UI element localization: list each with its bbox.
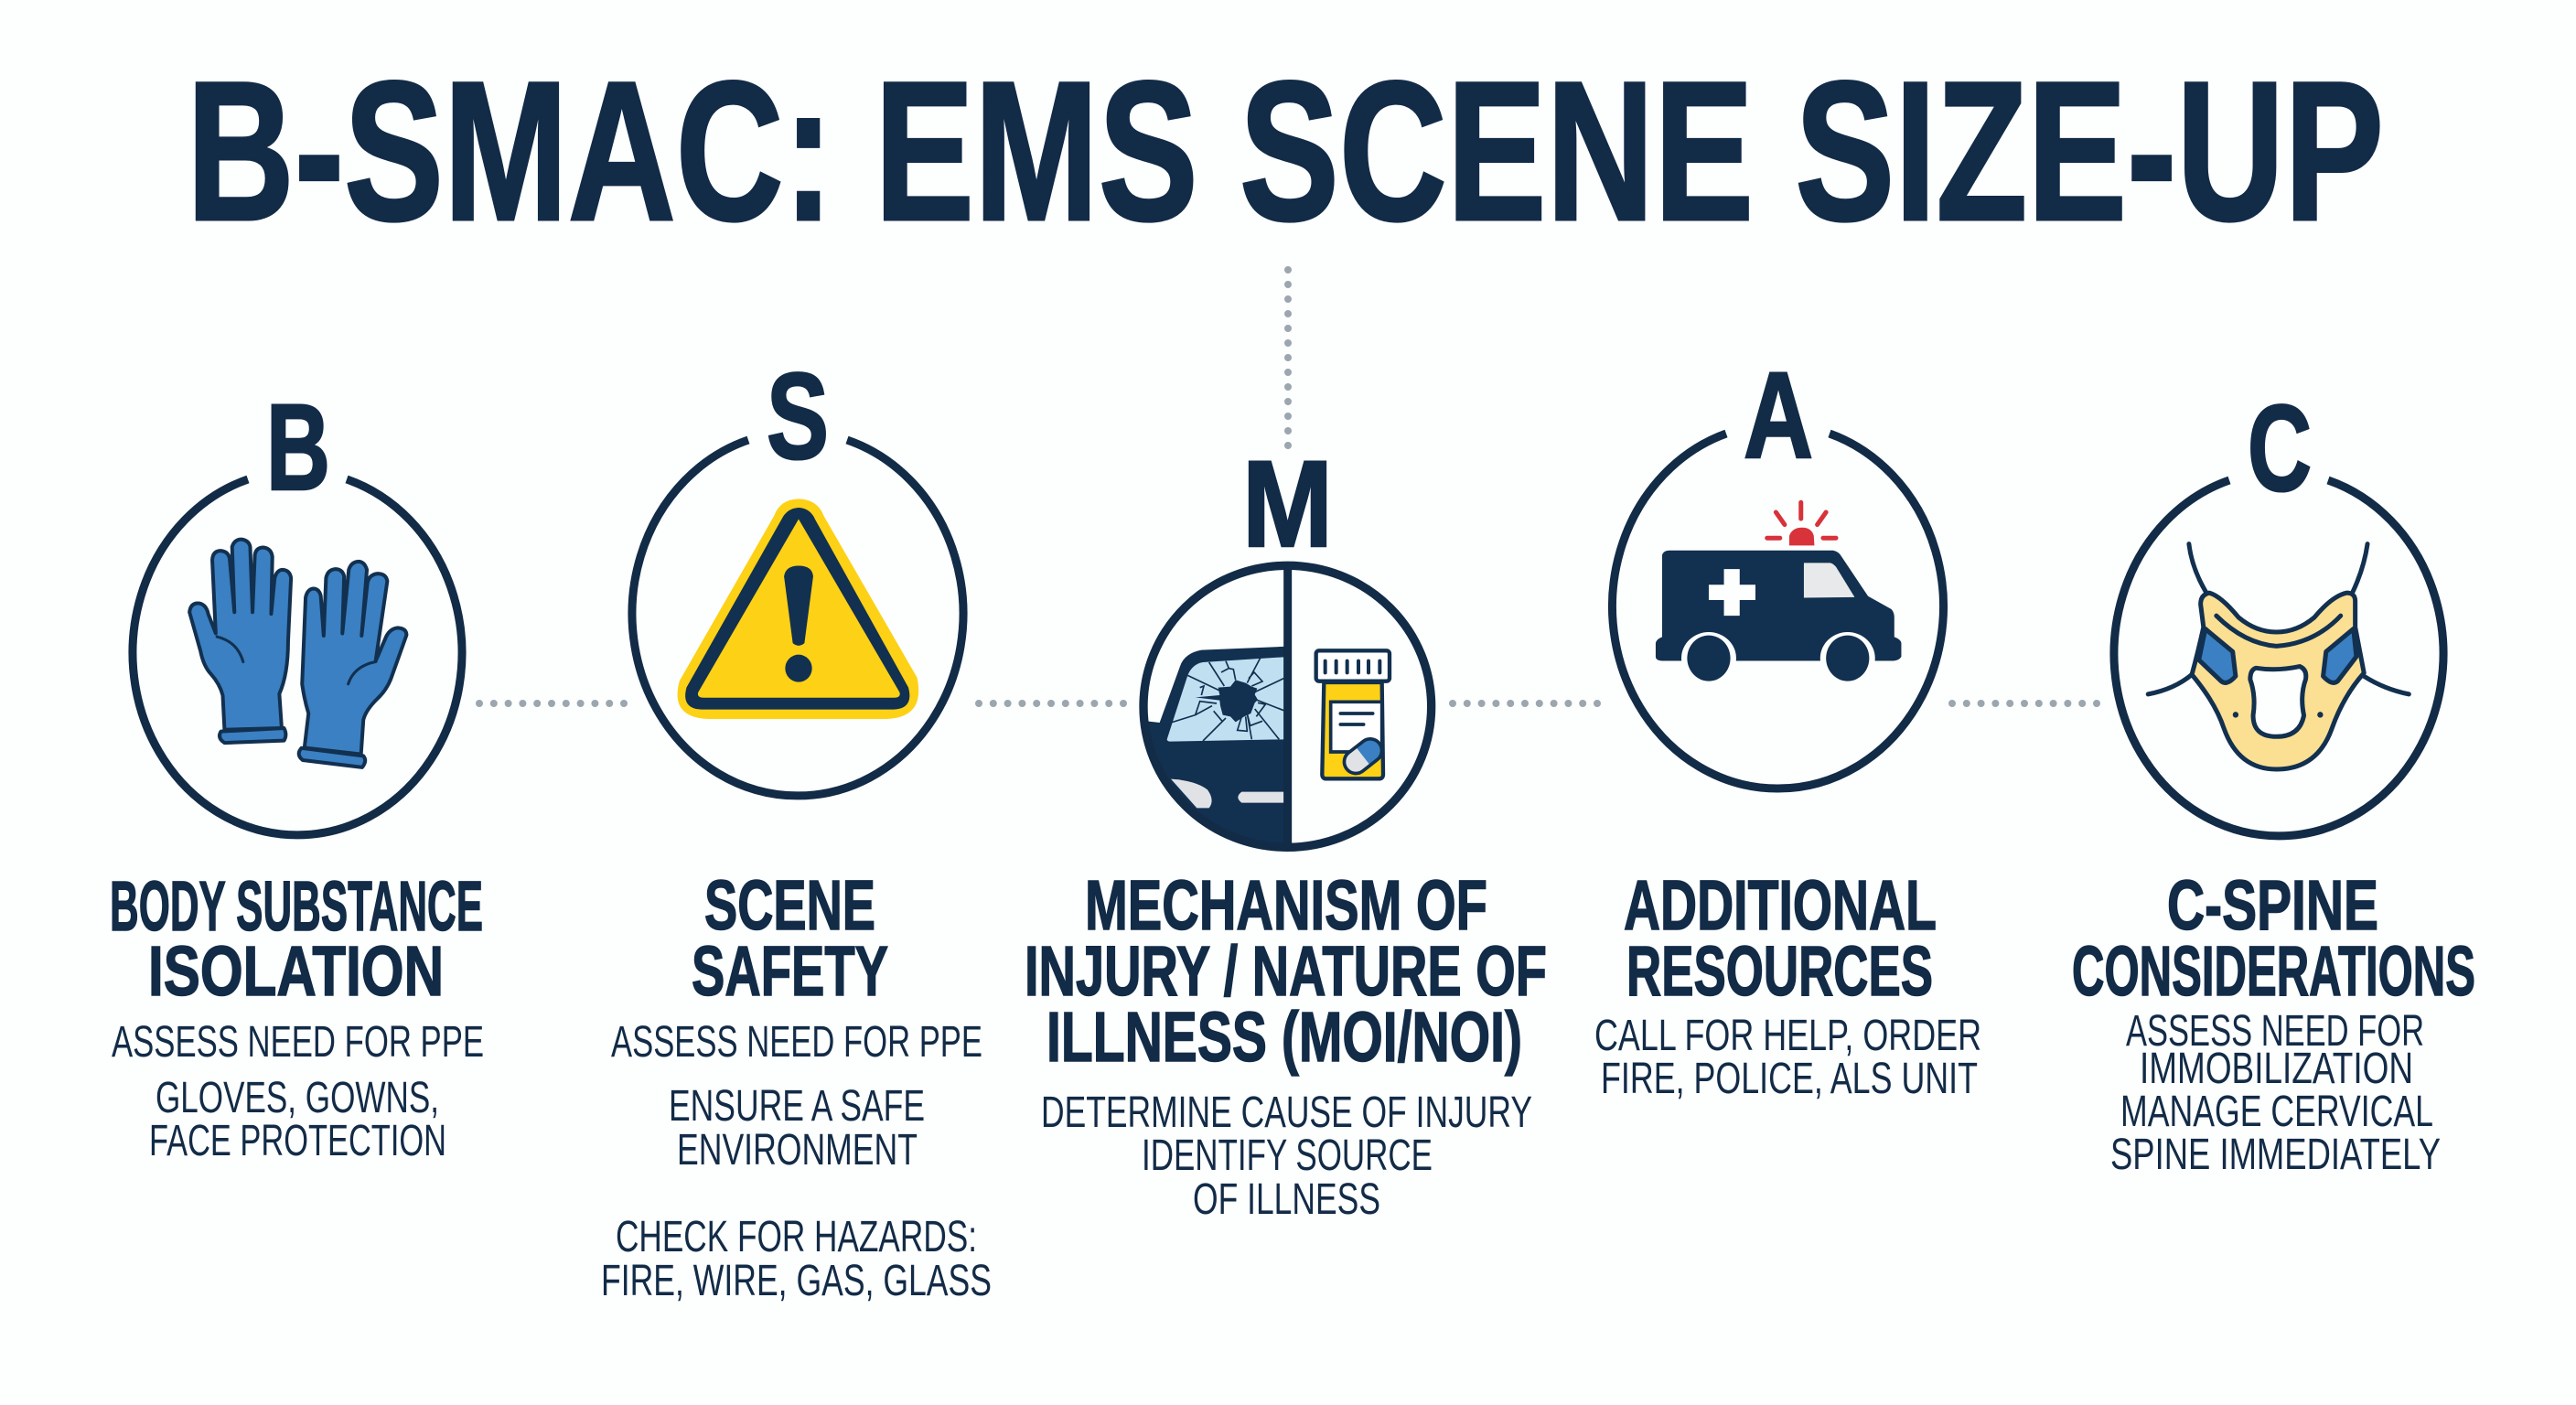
heading S — [692, 866, 888, 1011]
description C: SPINE IMMEDIATELY — [2110, 1131, 2441, 1179]
connector: B to S — [479, 700, 625, 707]
letter C: C — [2248, 381, 2312, 517]
description M: IDENTIFY SOURCE — [1142, 1132, 1433, 1180]
letter B: B — [266, 380, 330, 516]
description B: GLOVES, GOWNS, — [156, 1074, 439, 1122]
connector: title to M — [1284, 270, 1292, 446]
description S: ENSURE A SAFE — [669, 1082, 925, 1131]
circle S — [632, 440, 963, 796]
letter M: M — [1242, 436, 1333, 573]
description M: DETERMINE CAUSE OF INJURY — [1041, 1089, 1532, 1137]
icon: ambulance — [1649, 502, 1906, 687]
heading S: SAFETY — [692, 932, 888, 1011]
description A: FIRE, POLICE, ALS UNIT — [1601, 1055, 1978, 1103]
heading C — [2072, 866, 2475, 1011]
connector: M to A — [1453, 700, 1598, 707]
description S: ASSESS NEED FOR PPE — [611, 1018, 982, 1067]
description C — [2110, 1007, 2441, 1179]
description A: CALL FOR HELP, ORDER — [1594, 1012, 1981, 1060]
heading A: RESOURCES — [1626, 932, 1933, 1011]
connector: A to C — [1952, 700, 2098, 707]
panel: C c-spine considerations — [2072, 381, 2475, 1179]
heading M — [1025, 866, 1547, 1077]
letter S: S — [767, 349, 829, 485]
heading B: ISOLATION — [148, 932, 444, 1011]
heading A: ADDITIONAL — [1624, 866, 1937, 945]
letter A: A — [1744, 348, 1813, 484]
heading B — [110, 867, 483, 1011]
heading M: MECHANISM OF — [1085, 866, 1487, 945]
icon: warning triangle — [678, 499, 918, 719]
description M — [1041, 1089, 1532, 1224]
description C: MANAGE CERVICAL — [2120, 1088, 2433, 1136]
icon: gloves — [189, 540, 406, 767]
circle B — [133, 479, 462, 835]
car — [1149, 646, 1284, 843]
panel: A additional resources — [1594, 348, 1981, 1103]
description A — [1594, 1012, 1981, 1103]
icon: cervical collar — [2148, 544, 2409, 769]
description S — [601, 1018, 992, 1305]
description B — [112, 1018, 484, 1165]
description S: CHECK FOR HAZARDS: — [616, 1213, 977, 1261]
pill bottle — [1316, 650, 1390, 778]
description B: ASSESS NEED FOR PPE — [112, 1018, 484, 1067]
description M: OF ILLNESS — [1193, 1175, 1380, 1224]
description S: ENVIRONMENT — [677, 1126, 918, 1174]
heading B: BODY SUBSTANCE — [110, 867, 483, 946]
panel: S scene safety — [601, 349, 992, 1305]
description C: IMMOBILIZATION — [2140, 1045, 2413, 1093]
circle M — [1143, 565, 1432, 847]
circle C — [2114, 480, 2443, 836]
description S: FIRE, WIRE, GAS, GLASS — [601, 1257, 992, 1305]
connector: S to M — [979, 700, 1124, 707]
heading M: ILLNESS (MOI/NOI) — [1046, 998, 1522, 1077]
circle A — [1613, 434, 1943, 788]
description B: FACE PROTECTION — [149, 1117, 446, 1165]
description C: ASSESS NEED FOR — [2126, 1007, 2424, 1056]
heading M: INJURY / NATURE OF — [1025, 932, 1547, 1011]
panel: M mechanism of injury — [1025, 436, 1547, 1224]
heading A — [1624, 866, 1937, 1011]
icon: split circle with car and pill bottle — [1128, 565, 1432, 866]
heading C: C-SPINE — [2167, 866, 2378, 945]
panel: B body substance isolation — [110, 380, 484, 1165]
heading S: SCENE — [704, 866, 875, 945]
